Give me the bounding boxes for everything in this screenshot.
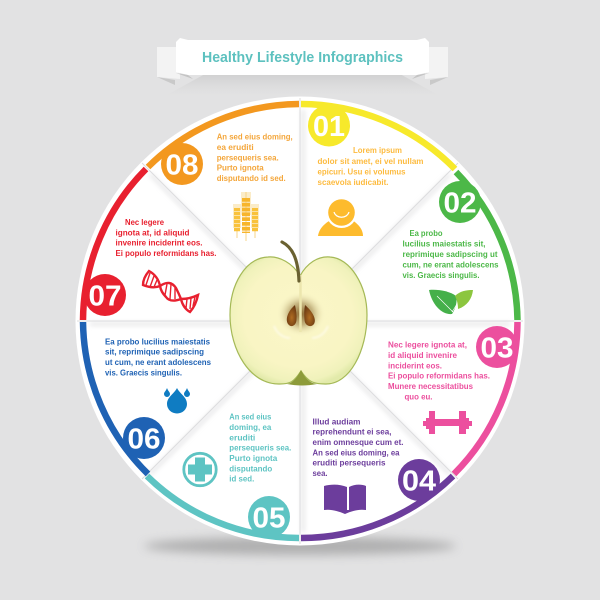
badge 05: 05 <box>252 502 286 534</box>
text 07: ignota at, id aliquid <box>116 227 190 237</box>
text 02: Ea probo <box>410 228 442 238</box>
badge 03 <box>476 326 518 368</box>
text 02 <box>402 228 499 280</box>
text 06: ut cum, ne erant adolescens <box>105 357 211 367</box>
badge 01 <box>308 104 350 146</box>
text 06 <box>105 336 211 377</box>
text 04 <box>312 416 404 478</box>
text 05: Purto ignota <box>229 453 277 463</box>
text 08: An sed eius doming, <box>217 131 293 141</box>
text 08: persequeris sea. <box>217 152 279 162</box>
arc 08 <box>148 104 299 167</box>
text 02: cum, ne erant adolescens <box>402 260 499 270</box>
text 07: Nec legere <box>125 217 164 227</box>
sector divider shadows <box>90 110 510 532</box>
badge 02 <box>439 181 481 223</box>
icon: water drops <box>164 388 190 414</box>
text 06: vis. Graecis singulis. <box>105 367 182 377</box>
segment 03 <box>388 322 518 474</box>
text 03: Nec legere ignota at, <box>388 340 467 350</box>
text 03: id aliquid invenire <box>388 350 457 360</box>
text 04: reprehendunt ei sea, <box>312 427 392 437</box>
text 05: disputando <box>229 463 272 473</box>
segment 08 <box>148 104 299 241</box>
text 06: sit, reprimique sadipscing <box>105 347 204 357</box>
ground shadow <box>144 537 456 555</box>
icon: DNA <box>143 271 198 312</box>
text 02: reprimique sadipscing ut <box>402 249 498 259</box>
text 03: Ei populo reformidans has. <box>388 371 490 381</box>
text 01 <box>318 145 424 187</box>
arc 02 <box>456 172 518 320</box>
stem <box>282 242 299 281</box>
badge 08: 08 <box>166 150 198 182</box>
segment 02 <box>402 172 518 320</box>
arc 03 <box>454 322 518 474</box>
text 08: Purto ignota <box>217 163 264 173</box>
icon: book <box>324 485 366 514</box>
text 04: Illud audiam <box>312 416 361 426</box>
badge 06 <box>123 417 165 459</box>
text 01: scaevola iudicabit. <box>318 177 388 187</box>
title banner <box>157 38 448 85</box>
text 04: eruditi persequeris <box>312 458 386 468</box>
badge 02: 02 <box>444 188 476 220</box>
seed left <box>287 305 297 326</box>
badge 08 <box>161 143 203 185</box>
arc 07 <box>83 169 146 320</box>
text 03 <box>388 340 490 401</box>
segment 05 <box>147 411 299 538</box>
text 07: Ei populo reformidans has. <box>116 248 216 258</box>
segment 06 <box>83 322 211 474</box>
segment 01 <box>301 104 455 236</box>
text 08: ea eruditi <box>217 142 254 152</box>
text 07 <box>116 217 216 258</box>
badge 07 <box>84 274 126 316</box>
arc 05 <box>147 476 299 538</box>
text 05: eruditi <box>229 432 255 442</box>
text 05: An sed eius <box>229 411 271 421</box>
text 03: Munere necessitatibus <box>388 381 473 391</box>
core highlights <box>274 326 328 338</box>
segment 04 <box>301 416 453 538</box>
centre line <box>299 275 302 332</box>
text 01: dolor sit amet, ei vel nullam <box>318 156 424 166</box>
text 03: quo eu. <box>404 391 432 401</box>
icon: medical cross <box>184 453 216 486</box>
sector dividers <box>77 98 523 544</box>
text 08 <box>217 131 293 183</box>
icon: dumbbell <box>423 411 472 434</box>
seed right <box>304 305 315 326</box>
icon: leaves <box>429 290 473 314</box>
text 05: doming, ea <box>229 422 271 432</box>
badge 07: 07 <box>88 280 122 312</box>
text 04: An sed eius doming, ea <box>312 447 400 457</box>
text 06: Ea probo lucilius maiestatis <box>105 336 210 346</box>
banner shadow <box>165 74 440 96</box>
badge 01: 01 <box>313 111 345 143</box>
apple core shading <box>277 292 325 336</box>
apple flesh <box>230 257 367 384</box>
text 04: enim omnesque cum et. <box>312 437 404 447</box>
text 04: sea. <box>312 468 328 478</box>
text 05: persequeris sea. <box>229 443 291 453</box>
title: Healthy Lifestyle Infographics <box>202 49 403 66</box>
segment 07 <box>83 169 216 320</box>
text 05: id sed. <box>229 474 254 484</box>
text 02: lucilius maiestatis sit, <box>402 238 486 248</box>
wheel <box>76 96 524 546</box>
text 08: disputando id sed. <box>217 173 286 183</box>
text 03: inciderint eos. <box>388 360 442 370</box>
badge 03: 03 <box>480 332 514 364</box>
apple base <box>287 370 317 386</box>
text 02: vis. Graecis singulis. <box>402 270 480 280</box>
apple <box>230 242 367 386</box>
icon: wheat <box>233 192 259 241</box>
text 05 <box>229 411 291 484</box>
text 01: epicuri. Usu ei volumus <box>318 166 406 176</box>
arc 06 <box>83 322 148 474</box>
badge 06: 06 <box>128 424 160 456</box>
text 07: invenire inciderint eos. <box>116 238 202 248</box>
text 01: Lorem ipsum <box>353 145 402 155</box>
badge 04 <box>398 459 440 501</box>
arc 04 <box>301 476 453 538</box>
icon: person <box>318 197 363 236</box>
badge 04: 04 <box>402 466 436 498</box>
arc 01 <box>301 104 455 169</box>
badge 05 <box>248 496 290 538</box>
